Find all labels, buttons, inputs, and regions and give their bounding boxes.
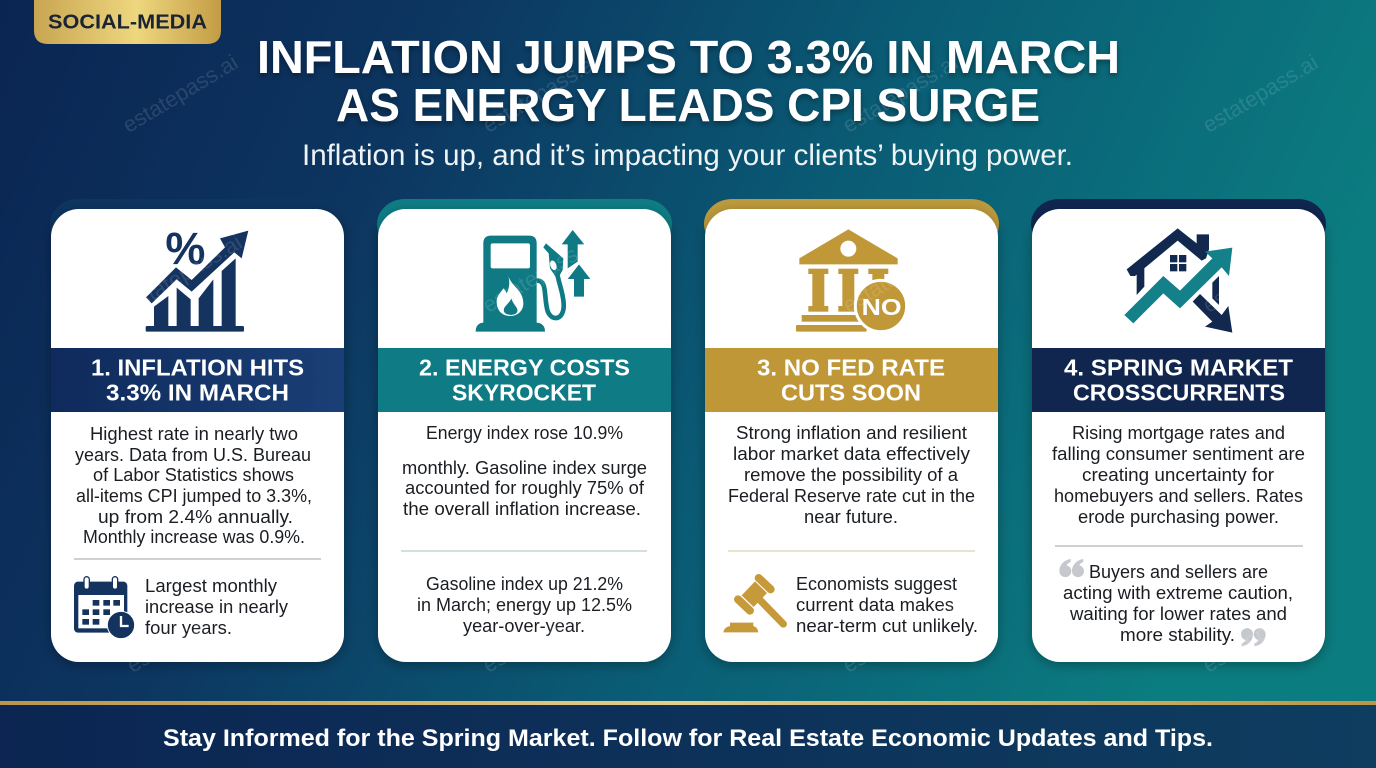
watermarks: estatepass.ai [838, 589, 962, 678]
heading band: 2. ENERGY COSTS [419, 354, 630, 380]
icon: bank with NO badge: NO [862, 294, 902, 320]
body text: Energy index rose 10.9% [426, 423, 623, 443]
heading band: 1. INFLATION HITS [91, 354, 304, 380]
icon: bank with NO badge [796, 229, 907, 332]
quote text: Buyers and sellers are [1089, 562, 1268, 582]
callout text: four years. [145, 618, 232, 638]
callout text: Economists suggest [796, 574, 957, 594]
body text: creating uncertainty for [1082, 465, 1274, 485]
icon: rising chart with percent [146, 223, 248, 332]
heading band: SKYROCKET [452, 380, 596, 406]
body text: accounted for roughly 75% of [405, 478, 645, 498]
callout text [796, 574, 978, 636]
body text: years. Data from U.S. Bureau [75, 445, 311, 465]
body text: near future. [804, 507, 898, 527]
heading band [378, 348, 671, 412]
body text: erode purchasing power. [1078, 507, 1279, 527]
heading band: CUTS SOON [781, 380, 921, 406]
icon: rising chart with percent: % [165, 223, 205, 274]
watermarks [118, 49, 1322, 678]
panel: spring market crosscurrents [1031, 199, 1326, 662]
body text: labor market data effectively [733, 444, 970, 464]
subtitle: Inflation is up, and it’s impacting your clients’ buying power. [302, 139, 1073, 172]
watermarks: estatepass.ai [838, 229, 962, 318]
callout text: near-term cut unlikely. [796, 616, 978, 636]
quote text: acting with extreme caution, [1063, 583, 1293, 603]
watermarks: estatepass.ai [838, 49, 962, 138]
body text [75, 424, 312, 547]
watermarks: estatepass.ai [122, 589, 246, 678]
footer [0, 701, 1376, 768]
badge: social-media [34, 0, 221, 44]
footer: Stay Informed for the Spring Market. Follow for Real Estate Economic Updates and Tips. [163, 725, 1213, 752]
body text: of Labor Statistics shows [93, 465, 294, 485]
heading band [705, 348, 998, 412]
callout text [417, 574, 632, 636]
icon: closing quote [1241, 628, 1266, 646]
body text [728, 423, 975, 527]
body text: monthly. Gasoline index surge [402, 458, 647, 478]
body text: Monthly increase was 0.9%. [83, 527, 305, 547]
badge: social-media: SOCIAL-MEDIA [48, 12, 207, 34]
body text [402, 423, 647, 519]
panel: energy costs skyrocket [377, 199, 672, 662]
watermarks: estatepass.ai [478, 229, 602, 318]
title: INFLATION JUMPS TO 3.3% IN MARCH [257, 31, 1120, 83]
heading band [1032, 348, 1325, 412]
body text: homebuyers and sellers. Rates [1054, 486, 1303, 506]
body text: remove the possibility of a [744, 465, 959, 485]
title [257, 31, 1120, 131]
heading band: CROSSCURRENTS [1073, 380, 1285, 406]
icon: gavel [723, 578, 783, 632]
callout text: Largest monthly [145, 576, 277, 596]
callout text: current data makes [796, 595, 954, 615]
body text: Rising mortgage rates and [1072, 423, 1285, 443]
body text [1052, 423, 1305, 527]
callout text: year-over-year. [463, 616, 585, 636]
heading band [51, 348, 344, 412]
watermarks: estatepass.ai [118, 49, 242, 138]
watermarks: estatepass.ai [122, 229, 246, 318]
watermarks: estatepass.ai [1198, 49, 1322, 138]
body text: all-items CPI jumped to 3.3%, [76, 486, 312, 506]
watermarks: estatepass.ai [1198, 589, 1322, 678]
heading band: 4. SPRING MARKET [1064, 354, 1293, 380]
heading band: 3.3% IN MARCH [106, 380, 289, 406]
watermarks: estatepass.ai [478, 49, 602, 138]
icon: house with up and down arrows [1124, 228, 1232, 333]
body text: Federal Reserve rate cut in the [728, 486, 975, 506]
icon: opening quote [1059, 559, 1084, 577]
callout text [145, 576, 288, 638]
body text: falling consumer sentiment are [1052, 444, 1305, 464]
quote text [1063, 562, 1293, 645]
body text: the overall inflation increase. [403, 499, 641, 519]
watermarks: estatepass.ai [478, 589, 602, 678]
callout text: in March; energy up 12.5% [417, 595, 632, 615]
watermarks: estatepass.ai [1198, 229, 1322, 318]
body text: Highest rate in nearly two [90, 424, 298, 444]
heading band: 3. NO FED RATE [757, 354, 945, 380]
panel: no fed rate cuts [704, 199, 999, 662]
panel: inflation hits 3.3% [50, 199, 345, 662]
body text: Strong inflation and resilient [736, 423, 967, 443]
callout text: increase in nearly [145, 597, 288, 617]
callout text: Gasoline index up 21.2% [426, 574, 623, 594]
icon: gas pump with flame and arrows [476, 230, 590, 332]
icon: calendar with clock [74, 577, 135, 639]
body text: up from 2.4% annually. [98, 507, 293, 527]
quote text: more stability. [1120, 625, 1235, 645]
quote text: waiting for lower rates and [1069, 604, 1287, 624]
title: AS ENERGY LEADS CPI SURGE [336, 79, 1040, 131]
